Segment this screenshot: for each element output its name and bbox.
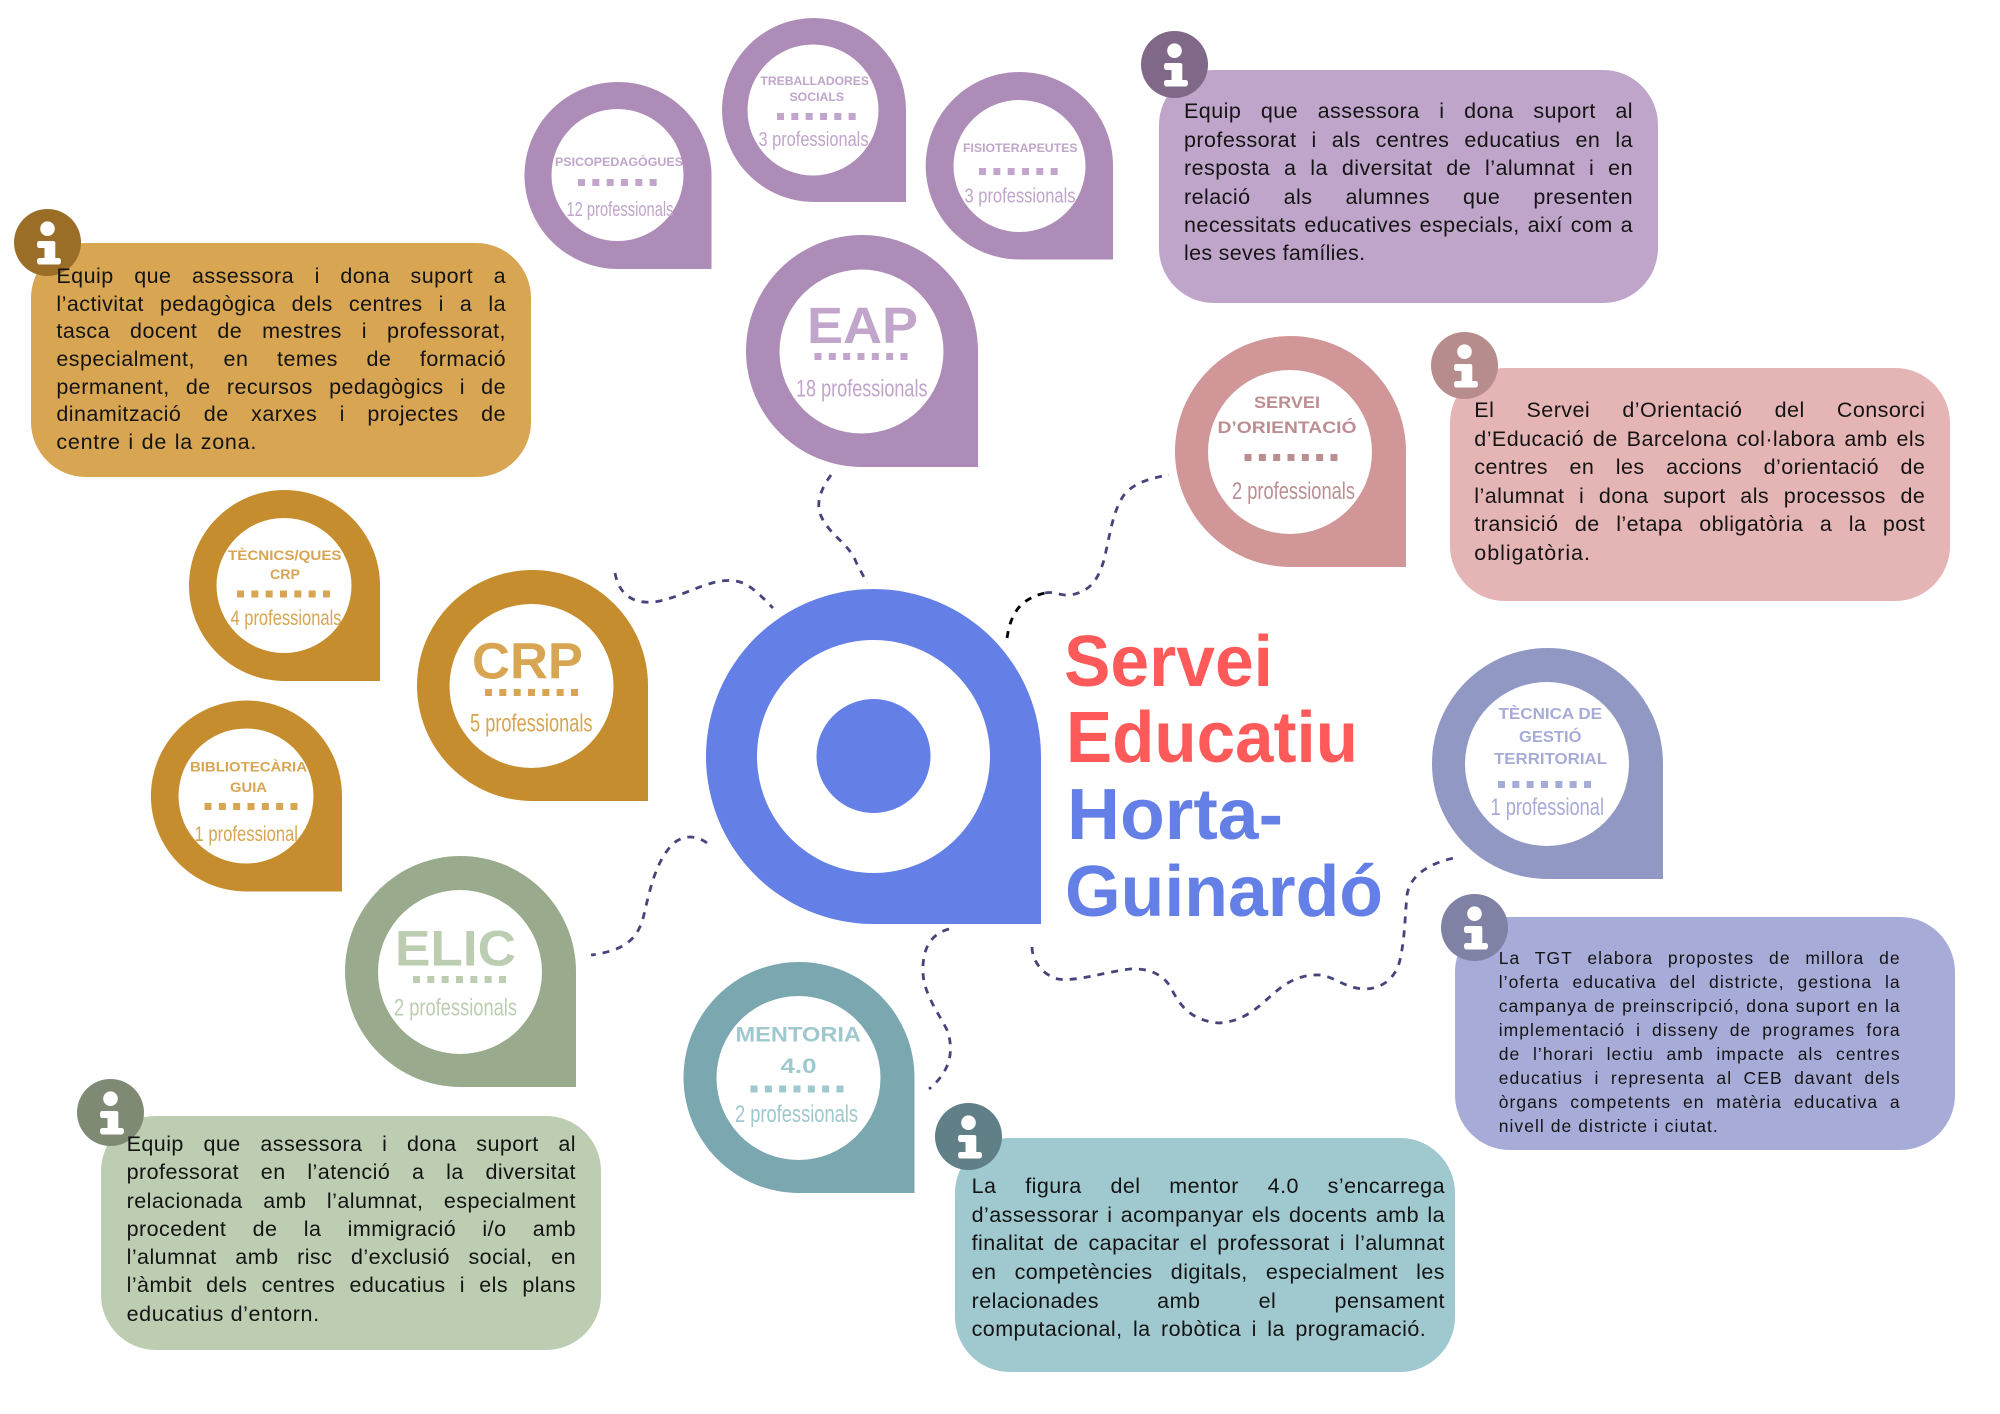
text: TGT description: òrgans competents en matèria educativa a (1499, 1092, 1901, 1112)
text: Mentoria 4.0 description (972, 1174, 1445, 1341)
pin: Treballadores socials: SOCIALS (790, 90, 844, 104)
text: Mentoria 4.0 description: La figura del mentor 4.0 s’encarrega (972, 1174, 1445, 1198)
pin: ELIC: ELIC (395, 920, 516, 976)
icon: info (1431, 332, 1498, 399)
pin: Tècnica de gestió territorial: 1 professional (1490, 794, 1604, 821)
pin: Fisioterapeutes: FISIOTERAPEUTES (963, 141, 1078, 155)
pin: Tècnics/ques CRP: 4 professionals (230, 607, 342, 630)
pin: Bibliotecària guia: 1 professional (194, 823, 298, 846)
panel: Mentoria 4.0 description (935, 1103, 1455, 1372)
text: CRP description: permanent, de recursos pedagògics i de (56, 375, 506, 399)
pin: Treballadores socials (722, 18, 906, 202)
pin: EAP (746, 235, 978, 467)
pin: Mentoria 4.0 (684, 962, 914, 1193)
pin: Fisioterapeutes (926, 72, 1113, 260)
text: CRP description: l’activitat pedagògica dels centres i a la (56, 292, 506, 316)
text: CRP description: dinamització de xarxes i projectes de (56, 402, 506, 426)
text: Servei d'Orientació description: El Servei d’Orientació del Consorci (1474, 398, 1925, 422)
text: CRP description: centre i de la zona. (56, 430, 257, 454)
text: EAP description: professorat i als centres educatius en la (1184, 128, 1633, 152)
panel: CRP description (14, 209, 531, 477)
pin: Servei d'Orientació: D’ORIENTACIÓ (1218, 418, 1356, 437)
panel background (101, 1116, 601, 1350)
connector: CRP to centre (615, 573, 773, 608)
text: TGT description: de l’horari lectiu amb impacte als centres (1499, 1044, 1901, 1064)
text: CRP description: especialment, en temes de formació (56, 347, 506, 371)
icon: info (935, 1103, 1002, 1170)
text: TGT description (1499, 948, 1901, 1136)
pin: Mentoria 4.0: 2 professionals (735, 1101, 858, 1128)
text: Servei d'Orientació description: centres en les accions d’orientació de (1474, 455, 1925, 479)
icon: info (1441, 894, 1508, 961)
panel background (1158, 70, 1658, 303)
text: Servei d'Orientació description: d’Educació de Barcelona col·labora amb els (1474, 426, 1925, 450)
text: ELIC description: educatius d’entorn. (127, 1302, 320, 1326)
text: ELIC description: l’àmbit dels centres educatius i els plans (127, 1273, 576, 1297)
text: EAP description: Equip que assessora i dona suport al (1184, 99, 1633, 123)
text: ELIC description: relacionada amb l’alumnat, especialment (127, 1189, 576, 1213)
connector: Servei d'Orientació to centre (1007, 475, 1169, 638)
pin: ELIC (345, 856, 576, 1087)
panel background (31, 243, 531, 477)
pin: Fisioterapeutes: 3 professionals (964, 186, 1076, 208)
connector: ELIC to centre (591, 837, 707, 955)
panel background (1455, 917, 1955, 1150)
text: ELIC description: professorat en l’atenció a la diversitat (127, 1160, 576, 1184)
text: ELIC description (127, 1132, 576, 1326)
text: TGT description: educatius i representa al CEB davant dels (1499, 1068, 1901, 1088)
pin: Servei d'Orientació: SERVEI (1254, 393, 1320, 412)
icon: info (77, 1079, 144, 1146)
text: TGT description: implementació i disseny de programes fora (1499, 1020, 1901, 1040)
pin: CRP: CRP (472, 632, 583, 690)
pin: Bibliotecària guia: GUIA (230, 780, 267, 795)
text: ELIC description: Equip que assessora i dona suport al (127, 1132, 576, 1156)
pin: Mentoria 4.0: 4.0 (780, 1055, 816, 1078)
text: EAP description: resposta a la diversitat de l’alumnat i en (1184, 156, 1633, 180)
text: TGT description: campanya de preinscripció, dona suport en la (1499, 996, 1901, 1016)
text: Servei d'Orientació description (1474, 398, 1925, 564)
panel: Tècnica de gestió territorial description (1441, 894, 1955, 1150)
text: Servei d'Orientació description: obligatòria. (1474, 540, 1591, 564)
icon: info (1141, 31, 1208, 98)
pin: Servei d'Orientació (1175, 336, 1406, 567)
pin: Psicopedagògues (524, 82, 712, 269)
text: Servei d'Orientació description: transició de l’etapa obligatòria a la post (1474, 512, 1925, 536)
text: Mentoria 4.0 description: relacionades amb el pensament (972, 1289, 1445, 1313)
pin: EAP: 18 professionals (796, 376, 928, 402)
pin: Tècnics/ques CRP: TÈCNICS/QUES (228, 548, 342, 563)
pin: Mentoria 4.0: MENTORIA (736, 1024, 861, 1046)
text: EAP description (1184, 99, 1633, 265)
text: EAP description: relació als alumnes que presenten (1184, 185, 1633, 209)
icon: info (14, 209, 81, 276)
pin: Bibliotecària guia (151, 700, 342, 892)
pin: Tècnica de gestió territorial: TERRITORIAL (1494, 751, 1607, 768)
pin: EAP: EAP (807, 297, 918, 354)
pin: Tècnics/ques CRP: CRP (270, 567, 300, 582)
text: ELIC description: procedent de la immigració i/o amb (127, 1217, 576, 1241)
title: Servei Educatiu Horta-Guinardó: Servei (1064, 622, 1273, 702)
title: Servei Educatiu Horta-Guinardó: Educatiu (1066, 698, 1358, 778)
text: TGT description: La TGT elabora propostes de millora de (1499, 948, 1901, 968)
text: ELIC description: l’alumnat amb risc d’exclusió social, en (127, 1245, 576, 1269)
panel: EAP description (1141, 31, 1658, 303)
pin: CRP: 5 professionals (470, 710, 592, 738)
panel: ELIC description (77, 1079, 601, 1350)
text: EAP description: les seves famílies. (1184, 241, 1365, 265)
text: TGT description: nivell de districte i ciutat. (1499, 1116, 1719, 1136)
pin: Psicopedagògues: 12 professionals (566, 199, 674, 221)
panel background (955, 1138, 1455, 1372)
text: Mentoria 4.0 description: computacional, la robòtica i la programació. (972, 1317, 1426, 1341)
text: TGT description: l’oferta educativa del districte, gestiona la (1499, 972, 1901, 992)
panel background (1450, 368, 1950, 601)
panel: Servei d'Orientació description (1431, 332, 1950, 601)
text: Mentoria 4.0 description: en competències digitals, especialment les (972, 1260, 1445, 1284)
pin: Treballadores socials: TREBALLADORES (760, 74, 869, 88)
pin: Tècnica de gestió territorial: GESTIÓ (1519, 728, 1582, 746)
text: CRP description (56, 264, 506, 454)
title: Servei Educatiu Horta-Guinardó (1064, 622, 1383, 932)
text: Mentoria 4.0 description: d’assessorar i acompanyar els docents amb la (972, 1203, 1445, 1227)
pin: Psicopedagògues: PSICOPEDAGÒGUES (555, 154, 683, 169)
pin: Servei d'Orientació: 2 professionals (1232, 478, 1355, 505)
text: Servei d'Orientació description: l’alumnat i dona suport als processos de (1474, 484, 1925, 508)
text: CRP description: Equip que assessora i dona suport a (56, 264, 506, 288)
pin: ELIC: 2 professionals (394, 994, 517, 1022)
pin: central logo (706, 589, 1041, 924)
pin: CRP (417, 570, 648, 801)
title: Servei Educatiu Horta-Guinardó: Guinardó (1065, 852, 1383, 932)
pin: Tècnics/ques CRP (189, 490, 380, 681)
pin: Bibliotecària guia: BIBLIOTECÀRIA (190, 760, 307, 774)
pin: Treballadores socials: 3 professionals (758, 129, 868, 151)
pin: Tècnica de gestió territorial: TÈCNICA DE (1498, 706, 1602, 723)
title: Servei Educatiu Horta-Guinardó: Horta- (1067, 775, 1283, 855)
text: Mentoria 4.0 description: finalitat de capacitar el professorat i l’alumnat (972, 1231, 1445, 1255)
connector: Mentoria to centre (923, 929, 950, 1089)
connector: EAP to centre (819, 475, 867, 583)
pin: Tècnica de gestió territorial (1432, 648, 1663, 879)
text: CRP description: tasca docent de mestres i professorat, (56, 319, 506, 343)
connector: Tècnica de gestió territorial to centre (1032, 858, 1454, 1023)
text: EAP description: necessitats educatives especials, així com a (1184, 213, 1633, 237)
